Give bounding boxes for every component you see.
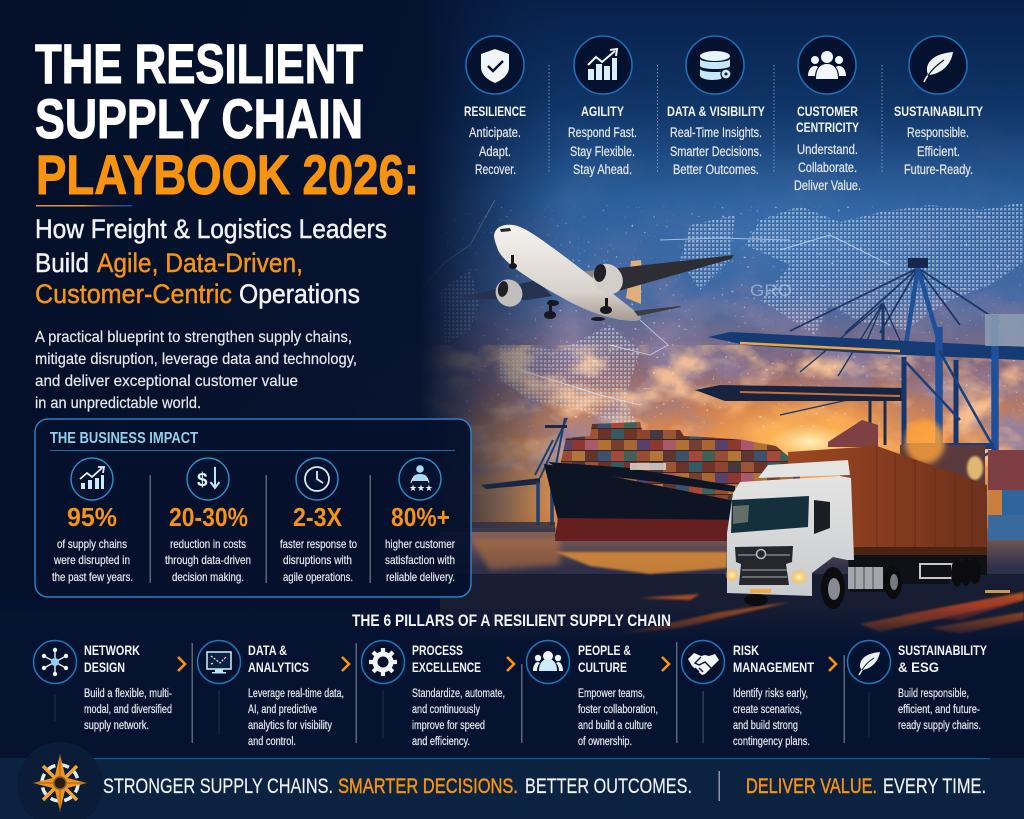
intro paragraph: in an unpredictable world. xyxy=(35,395,201,412)
title xyxy=(35,32,419,206)
principle: sustainability: Efficient. xyxy=(917,144,960,159)
principle: resilience xyxy=(464,36,526,177)
pillar: process excellence: Standardize, automate, xyxy=(412,688,505,700)
pillar: network design: Build a flexible, multi- xyxy=(84,688,172,700)
principle: customer centricity xyxy=(794,36,861,193)
stat: 20-30%: reduction in costs xyxy=(170,537,246,551)
pillar: people & culture xyxy=(526,640,658,748)
pillar: process excellence: PROCESS xyxy=(412,642,463,658)
cab body xyxy=(727,476,854,596)
tailplane xyxy=(634,306,681,316)
fuselage xyxy=(494,225,641,321)
tagline xyxy=(103,771,986,801)
top row: core principles xyxy=(464,36,984,193)
pillar: sustainability & esg: SUSTAINABILITY xyxy=(898,642,988,658)
intro paragraph xyxy=(35,329,357,412)
pillar: process excellence: EXCELLENCE xyxy=(412,659,481,675)
stat: 95%: the past few years. xyxy=(52,570,133,584)
arrow xyxy=(342,657,349,671)
chassis xyxy=(848,555,987,592)
stat: 20-30%: $ xyxy=(197,470,208,491)
pillar: data & analytics: DATA & xyxy=(248,642,287,658)
stat: 80%+: ★★★ xyxy=(409,483,433,493)
pillar: network design: supply network. xyxy=(84,720,149,732)
title: THE RESILIENT xyxy=(35,32,363,95)
pillar: risk management: contingency plans. xyxy=(733,736,810,748)
principle: sustainability xyxy=(894,36,984,177)
intro paragraph: and deliver exceptional customer value xyxy=(35,373,298,390)
intro paragraph: A practical blueprint to strengthen supply chains, xyxy=(35,329,352,346)
panel: the business impact xyxy=(35,419,471,597)
principle: data & visibility: Real-Time Insights. xyxy=(670,125,762,140)
pillar: risk management: create scenarios, xyxy=(733,704,802,716)
airplane xyxy=(460,225,734,321)
panel heading: THE BUSINESS IMPACT xyxy=(50,430,198,447)
pillar: people & culture: and build a culture xyxy=(578,720,652,732)
stat: 80%+: reliable delivery. xyxy=(386,570,455,584)
principle: agility xyxy=(568,36,637,177)
icon: compass xyxy=(33,754,87,812)
title: SUPPLY CHAIN xyxy=(35,87,363,150)
left crane xyxy=(481,418,567,525)
arrow xyxy=(178,657,185,671)
principle: customer centricity: Deliver Value. xyxy=(794,178,861,193)
roof fairing xyxy=(758,460,850,478)
pillar: people & culture: Empower teams, xyxy=(578,688,645,700)
pillar: process excellence xyxy=(362,640,505,748)
right wing xyxy=(574,255,734,296)
pillar: sustainability & esg xyxy=(848,640,988,732)
landing gear xyxy=(509,255,612,321)
stat: 80%+: higher customer xyxy=(385,537,455,551)
principle: sustainability: Future-Ready. xyxy=(904,162,973,177)
left wing xyxy=(460,280,552,300)
yard containers and lights xyxy=(828,420,878,447)
tagline: DELIVER VALUE. xyxy=(746,774,877,798)
principle: agility: Stay Ahead. xyxy=(573,162,632,177)
pillar: sustainability & esg: Build responsible, xyxy=(898,688,969,700)
arrow xyxy=(829,657,836,671)
arrow xyxy=(507,657,514,671)
stat: 80%+ xyxy=(385,458,455,584)
headlights xyxy=(725,568,739,582)
subtitle: Agile, Data-Driven, xyxy=(97,248,303,278)
principle: sustainability: Responsible. xyxy=(907,125,969,140)
stat: 20-30% xyxy=(165,458,251,584)
stat: 2-3X: agile operations. xyxy=(283,570,353,584)
tagline: STRONGER SUPPLY CHAINS. xyxy=(103,774,333,798)
principle: sustainability: SUSTAINABILITY xyxy=(894,103,984,119)
principle: data & visibility xyxy=(667,36,766,177)
lower dark fade xyxy=(0,605,1024,660)
subtitle: Operations xyxy=(239,279,360,309)
principle: resilience: Recover. xyxy=(475,162,516,177)
front wheels xyxy=(744,594,768,606)
pillar: process excellence: and efficiency. xyxy=(412,736,470,748)
intro paragraph: mitigate disruption, leverage data and technology, xyxy=(35,351,357,368)
stat: 2-3X: 2-3X xyxy=(293,502,343,532)
principle: data & visibility: DATA & VISIBILITY xyxy=(667,103,766,119)
stat: 20-30%: through data-driven xyxy=(165,553,251,567)
principle: resilience: Anticipate. xyxy=(469,125,521,140)
pillar: network design: DESIGN xyxy=(84,659,125,675)
tagline: EVERY TIME. xyxy=(883,774,986,798)
pillar: process excellence: improve for speed xyxy=(412,720,485,732)
title underline xyxy=(36,205,132,206)
water and road xyxy=(440,528,1024,640)
pillar: data & analytics: analytics for visibility xyxy=(248,720,332,732)
stat: 2-3X xyxy=(280,458,357,584)
stat: 95%: 95% xyxy=(67,502,117,532)
pillar: sustainability & esg: ready supply chains. xyxy=(898,720,981,732)
container stacks xyxy=(560,422,800,500)
truck xyxy=(725,446,987,609)
principle: data & visibility: Better Outcomes. xyxy=(673,162,759,177)
subtitle: How Freight & Logistics Leaders xyxy=(35,214,387,244)
pillars row xyxy=(34,640,988,748)
pillar: data & analytics xyxy=(198,640,344,748)
subtitle: Build xyxy=(35,248,89,278)
grille xyxy=(735,546,793,585)
pillar: people & culture: foster collaboration, xyxy=(578,704,658,716)
tagline: SMARTER DECISIONS. xyxy=(338,774,518,798)
far tail fin xyxy=(626,260,641,304)
back crane xyxy=(695,303,905,445)
arrow xyxy=(662,657,669,671)
footer band xyxy=(0,742,1024,819)
pillar: risk management: and build strong xyxy=(733,720,798,732)
tagline: BETTER OUTCOMES. xyxy=(525,774,692,798)
pillar: data & analytics: Leverage real-time data, xyxy=(248,688,344,700)
stat: 95%: were disrupted in xyxy=(53,553,130,567)
pillar: people & culture: of ownership. xyxy=(578,736,632,748)
principle: customer centricity: CUSTOMER xyxy=(797,103,858,119)
pillar: risk management: MANAGEMENT xyxy=(733,659,814,675)
left dark overlay xyxy=(0,0,620,600)
stat: 2-3X: faster response to xyxy=(280,537,357,551)
pillar: risk management: Identify risks early, xyxy=(733,688,808,700)
principle: customer centricity: CENTRICITY xyxy=(796,119,859,135)
pillar: data & analytics: AI, and predictive xyxy=(248,704,317,716)
pillars heading: THE 6 PILLARS OF A RESILIENT SUPPLY CHAIN xyxy=(352,611,671,630)
stat: 2-3X: disruptions with xyxy=(283,553,352,567)
principle: data & visibility: Smarter Decisions. xyxy=(670,144,762,159)
pillar: data & analytics: and control. xyxy=(248,736,296,748)
pillar: data & analytics: ANALYTICS xyxy=(248,659,309,675)
pillar: people & culture: CULTURE xyxy=(578,659,627,675)
stat: 80%+: satisfaction with xyxy=(385,553,455,567)
principle: resilience: RESILIENCE xyxy=(464,103,526,119)
pillar: sustainability & esg: efficient, and future- xyxy=(898,704,980,716)
dotted world map overlay xyxy=(440,202,1024,430)
wheels xyxy=(884,565,902,599)
pillar: sustainability & esg: & ESG xyxy=(898,659,939,675)
map speckle lights xyxy=(440,205,1024,430)
stat: 80%+: 80%+ xyxy=(391,502,450,532)
stat: 95%: of supply chains xyxy=(57,537,127,551)
network lines xyxy=(420,200,890,405)
shipping container xyxy=(788,446,987,555)
subtitle xyxy=(35,214,387,309)
pillar: risk management: RISK xyxy=(733,642,759,658)
pillar: network design: modal, and diversified xyxy=(84,704,172,716)
pillar: risk management xyxy=(682,640,814,748)
principle: customer centricity: Understand. xyxy=(797,142,858,157)
stat: 95% xyxy=(52,458,133,584)
subtitle: Customer-Centric xyxy=(35,279,232,309)
title: PLAYBOOK 2026: xyxy=(36,143,419,206)
stat: 20-30%: decision making. xyxy=(172,570,244,584)
background scene: sky, port, water xyxy=(424,0,1024,635)
side window xyxy=(814,500,830,534)
cranes xyxy=(440,258,1024,540)
pillar: process excellence: and continuously xyxy=(412,704,480,716)
map text trace: GRO xyxy=(750,281,792,300)
stat: 20-30%: 20-30% xyxy=(169,502,248,532)
principle: agility: AGILITY xyxy=(581,103,625,119)
principle: agility: Respond Fast. xyxy=(568,125,637,140)
windshield xyxy=(731,496,809,533)
principle: customer centricity: Collaborate. xyxy=(798,160,857,175)
pillar: network design xyxy=(34,640,172,732)
principle: resilience: Adapt. xyxy=(479,144,511,159)
pillar: people & culture: PEOPLE & xyxy=(578,642,631,658)
engines xyxy=(490,258,629,312)
main crane xyxy=(708,258,1024,490)
container ship xyxy=(544,418,805,541)
pillar: network design: NETWORK xyxy=(84,642,140,658)
principle: agility: Stay Flexible. xyxy=(570,144,635,159)
